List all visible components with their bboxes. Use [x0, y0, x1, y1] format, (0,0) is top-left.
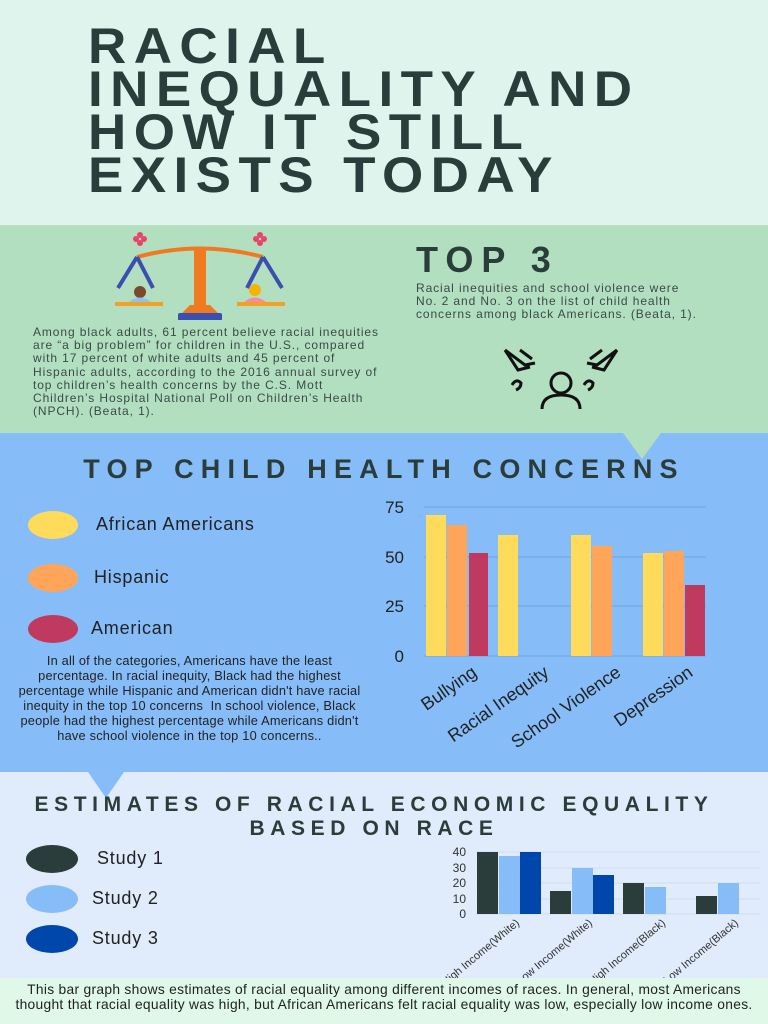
text: chart description: In all of the categories, Americans have the least percentage. In racial inequity, Black had the highest percentage while Hispanic and American didn't have racial inequity in the top 10 concerns In school violence, Black people had the highest percentage while Americans didn't have school violence in the top 10 concerns.. [19, 653, 360, 743]
title [88, 18, 639, 203]
legend: Hispanic [94, 567, 169, 587]
title: RACIAL [88, 18, 333, 74]
panel: economic equality [0, 772, 768, 978]
text: footer description: This bar graph shows estimates of racial equality among different incomes of races. In general, most Americans thought that racial equality was high, but African Americans felt racial equality was low, especially low income ones. [15, 982, 753, 1012]
bar chart: child health concerns: 75 [385, 498, 404, 517]
legend: Study 1 [97, 848, 164, 868]
panel: intro [0, 225, 768, 433]
text: top 3: Racial inequities and school violence were No. 2 and No. 3 on the list of child health concerns among black Americans. (Beata, 1). [416, 281, 697, 321]
bar chart: economic equality: 30 [453, 861, 466, 875]
bar chart: child health concerns [385, 498, 706, 752]
section: title [0, 0, 768, 225]
legend: Study 2 [92, 888, 159, 908]
heading: estimates: BASED ON RACE [250, 817, 498, 840]
bar chart: economic equality: 10 [453, 892, 466, 906]
bar chart: child health concerns: 50 [385, 548, 404, 567]
bar chart: economic equality: 0 [459, 907, 466, 921]
legend [26, 845, 164, 953]
legend: African Americans [96, 514, 255, 534]
heading: top 3: TOP 3 [416, 239, 559, 280]
heading: top child health concerns: TOP CHILD HEALTH CONCERNS [83, 454, 685, 484]
bar chart: child health concerns: Racial Inequity [444, 662, 552, 746]
bar chart: child health concerns: Bullying [417, 662, 480, 714]
bar chart: economic equality: 40 [453, 845, 466, 859]
title: INEQUALITY AND [88, 61, 639, 117]
icon: person with pointing hands [504, 348, 618, 409]
bar chart: child health concerns: 25 [385, 597, 404, 616]
heading: estimates: ESTIMATES OF RACIAL ECONOMIC EQUALITY [35, 793, 713, 816]
icon: scale [115, 232, 285, 320]
title: EXISTS TODAY [88, 147, 560, 203]
legend: American [91, 618, 173, 638]
bar chart: child health concerns: Depression [610, 662, 696, 730]
bar chart: economic equality [440, 845, 760, 980]
bar chart: economic equality: 20 [453, 876, 466, 890]
panel: footer text [0, 978, 768, 1024]
heading: estimates [35, 793, 713, 840]
pointer triangle [88, 772, 124, 798]
panel: child health concerns [0, 433, 768, 772]
title: HOW IT STILL [88, 104, 530, 160]
bar chart: child health concerns: 0 [395, 647, 404, 666]
legend: Study 3 [92, 928, 159, 948]
pointer triangle [623, 433, 661, 459]
text: intro paragraph: Among black adults, 61 percent believe racial inequities are “a big problem” for children in the U.S., compared with 17 percent of white adults and 45 percent of Hispanic adults, according to the 2016 annual survey of top children’s health concerns by the C.S. Mott Children’s Hospital National Poll on Children’s Health (NPCH). (Beata, 1). [33, 325, 379, 418]
bar chart: child health concerns: School Violence [507, 662, 624, 752]
legend [28, 511, 255, 643]
